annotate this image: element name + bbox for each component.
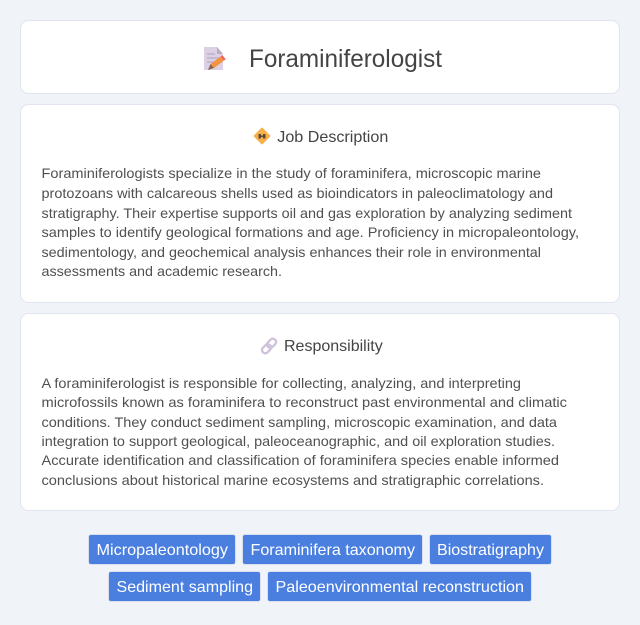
text block: responsibility: Accurate identification and classification of foraminifera species enable informed	[42, 452, 559, 468]
tag: Foraminifera taxonomy	[242, 534, 422, 564]
icon: orange diamond	[254, 128, 270, 144]
panel: title card	[20, 20, 620, 94]
text block: responsibility: microfossils known as foraminifera to reconstruct past environmental and climatic	[42, 394, 567, 410]
heading: job description: Job Description	[277, 129, 388, 146]
text block: job description: stratigraphy. Their expertise supports oil and gas exploration by analyzing sediment	[42, 205, 572, 221]
tag: Biostratigraphy: Biostratigraphy	[437, 542, 544, 559]
tag: Paleoenvironmental reconstruction: Paleoenvironmental reconstruction	[276, 579, 524, 596]
text block: job description: Foraminiferologists specialize in the study of foraminifera, microscopic marine	[42, 165, 541, 181]
tag: Paleoenvironmental reconstruction	[268, 572, 532, 602]
text block: job description: samples to identify geological formations and age. Proficiency in micropaleontology,	[42, 224, 579, 240]
text block: responsibility: conclusions about historical marine ecosystems and stratigraphic correlations.	[42, 472, 544, 488]
panel: responsibility	[20, 314, 620, 510]
panel: job description	[20, 104, 620, 302]
tag: Biostratigraphy	[430, 534, 552, 564]
text block: job description: protozoans with calcareous shells used as bioindicators in paleoclimatology and	[42, 185, 553, 201]
text block: responsibility	[42, 375, 567, 488]
text block: job description: assessments and academic research.	[42, 263, 282, 279]
text block: responsibility: integration to support geological, paleoceanographic, and oil exploration studies.	[42, 433, 555, 449]
heading: responsibility: Responsibility	[284, 338, 383, 355]
title: Foraminiferologist	[249, 45, 442, 73]
icon: chain link	[261, 337, 277, 355]
tag: Foraminifera taxonomy: Foraminifera taxonomy	[250, 542, 415, 559]
skill tags	[88, 534, 552, 602]
tag: Sediment sampling: Sediment sampling	[116, 579, 253, 596]
tag: Sediment sampling	[108, 572, 260, 602]
text block: responsibility: A foraminiferologist is responsible for collecting, analyzing, and interpreting	[42, 375, 521, 391]
tag: Micropaleontology: Micropaleontology	[96, 542, 228, 559]
tag: Micropaleontology	[88, 534, 236, 564]
text block: responsibility: conditions. They conduct sediment sampling, microscopic examination, and data	[42, 414, 557, 430]
text block: job description: sedimentology, and geochemical analysis enhances their role in environmental	[42, 244, 541, 260]
text block: job description	[42, 165, 579, 279]
icon: document with pencil	[204, 47, 226, 70]
